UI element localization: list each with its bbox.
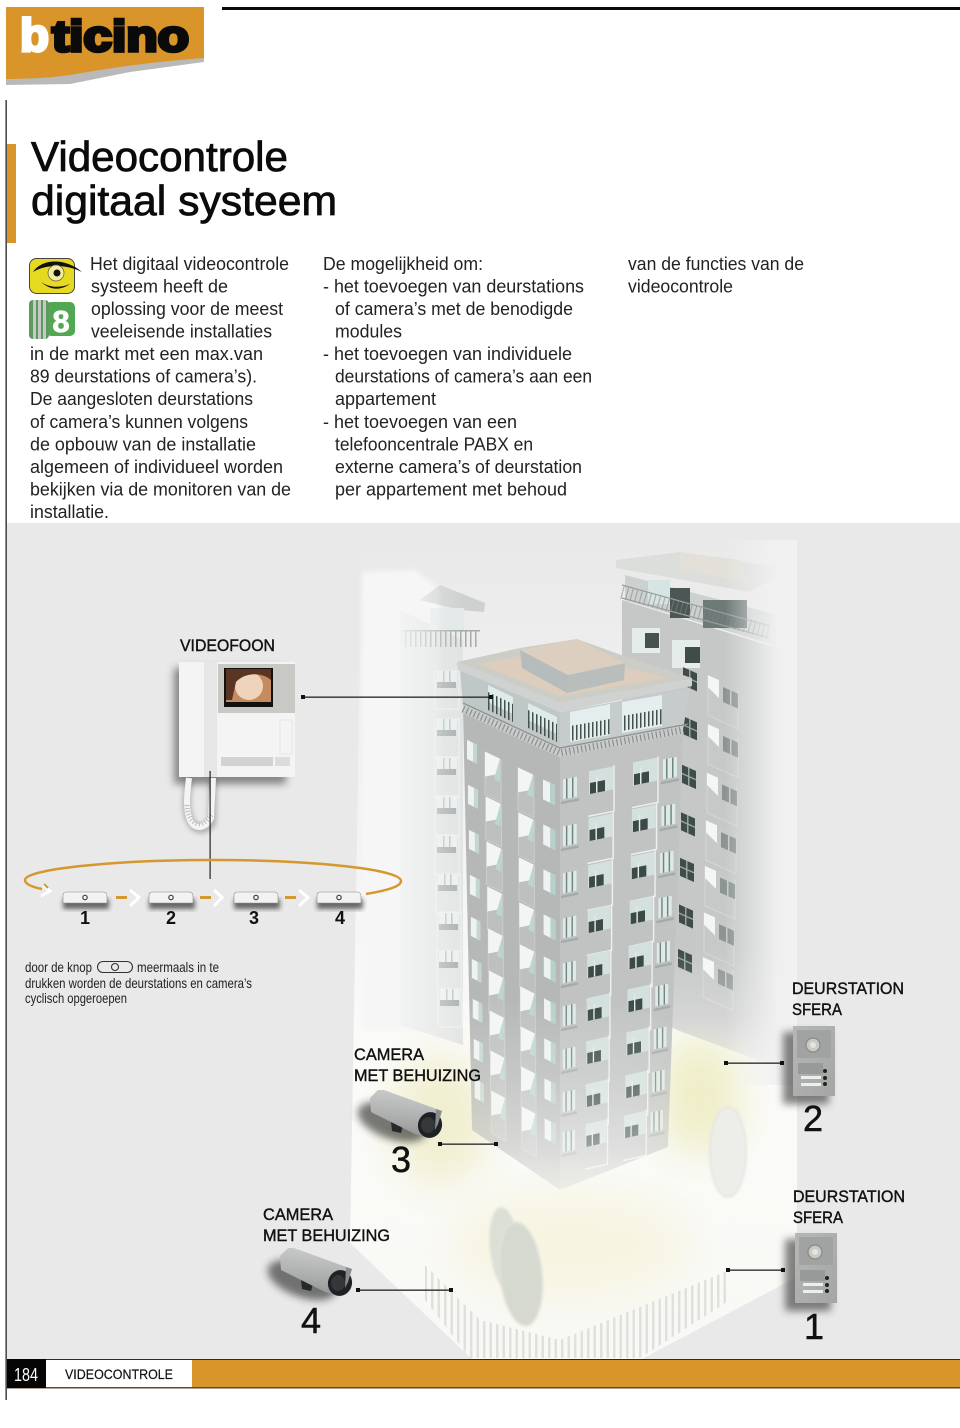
title: digitaal systeem [31,177,337,224]
arrow 1 to 2 [116,890,139,906]
arrow 3 to 4 [285,890,308,906]
label: deurstation 1: DEURSTATION [793,1187,905,1206]
diagram panel background [7,523,960,1360]
footer band [7,1359,960,1388]
label: deurstation 2: SFERA [792,1000,843,1019]
caption: door de knop [25,959,92,975]
text block: column 2: of camera’s met de benodigde [335,299,573,319]
title accent bar [7,144,16,243]
number 1: 1 [804,1306,824,1347]
footer: section title: VIDEOCONTROLE [65,1366,173,1382]
text block: column 2: De mogelijkheid om: [323,254,483,274]
number 4: 4 [301,1300,321,1341]
number 2: 2 [803,1098,823,1139]
text block: column 1: 89 deurstations of camera’s). [30,366,257,386]
connector: camera 3 [438,1142,498,1146]
label: camera 4: CAMERA [263,1205,334,1224]
text block: column 1: veeleisende installaties [91,322,272,342]
label: camera 3: CAMERA [354,1045,425,1064]
button 3 [234,892,280,909]
label: camera 4 [263,1205,390,1245]
button 4 [317,892,363,909]
text block: column 1: systeem heeft de [91,276,228,296]
camera 3 [352,1090,445,1150]
logo: bticino: ticino [52,12,189,61]
text block: column 2: - het toevoegen van deurstations [323,276,584,296]
connector: camera 4 [356,1288,453,1292]
top rule [222,7,960,10]
connector: door station 1 [726,1268,785,1272]
text block: column 1: De aangesloten deurstations [30,389,253,409]
text block: column 1: of camera’s kunnen volgens [30,412,248,432]
text block: column 2 [323,254,592,500]
text block: column 1: bekijken via de monitoren van de [30,480,291,500]
logo: bticino [6,7,204,85]
cycle loop arrow [25,860,401,896]
door station 2 [783,1026,835,1104]
button 2 [149,892,195,909]
text block: column 3: van de functies van de [628,254,804,274]
text block: column 1: Het digitaal videocontrole [90,254,289,274]
left page rule [6,100,7,1400]
title: Videocontrole [31,133,288,180]
button numbers: 3 [249,908,259,928]
label: camera 3 [354,1045,481,1085]
back tower right fade [725,540,797,1085]
text block: column 2: - het toevoegen van individuele [323,344,572,364]
label: deurstation 1: SFERA [793,1208,844,1227]
text block: column 1 [30,254,291,522]
caption [25,959,252,1006]
label: deurstation 1 [793,1187,905,1227]
caption: meermaals in te [137,959,219,975]
text block: column 1: algemeen of individueel worden [30,457,283,477]
text block: column 2: - het toevoegen van een [323,412,517,432]
trees [486,1107,746,1328]
building: back tower [616,552,770,1057]
caption: drukken worden de deurstations en camera’s [25,975,252,991]
connector: videophone to building [301,695,493,699]
building: left tower [400,585,485,1045]
text block: column 1: in de markt met een max.van [30,344,263,364]
label: camera 4: MET BEHUIZING [263,1226,390,1245]
left face [463,708,560,1190]
footer: page number: 184 [14,1365,38,1385]
button numbers: 2 [166,908,176,928]
caption: cyclisch opgeroepen [25,990,127,1006]
building: penthouse floor and roof [457,639,692,753]
title [31,133,337,224]
camera 4 [262,1248,355,1308]
text block: column 2: appartement [335,389,436,409]
button numbers: 1 [80,908,90,928]
text block: column 2: deurstations of camera’s aan een [335,366,592,386]
label: videofoon: VIDEOFOON [180,636,275,655]
text block: column 2: per appartement met behoud [335,480,567,500]
videophone [174,662,295,829]
building: main tower [463,708,683,1190]
logo: bticino: b [20,9,49,61]
icon: 8 door stations: 8 [52,304,70,339]
label: deurstation 2: DEURSTATION [792,979,904,998]
label: camera 3: MET BEHUIZING [354,1066,481,1085]
text block: column 1: installatie. [30,502,109,522]
right face [560,746,674,1190]
number 3: 3 [391,1139,411,1180]
label: deurstation 2 [792,979,904,1019]
text block: column 2: modules [335,322,402,342]
arrow 2 to 3 [200,890,222,906]
text block: column 2: telefooncentrale PABX en [335,434,533,454]
button numbers [80,908,345,928]
connector: door station 2 [724,1061,784,1065]
footer: page number [7,1359,46,1388]
connector: videophone to buttons [210,771,211,879]
text block: column 1: oplossing voor de meest [91,299,283,319]
button numbers: 4 [335,908,345,928]
text block: column 1: de opbouw van de installatie [30,434,256,454]
text block: column 3: videocontrole [628,276,733,296]
footer: section title [46,1360,192,1387]
text block: column 3 [628,254,804,296]
icon: 8 door stations [29,300,75,339]
door station 1 [785,1233,837,1311]
button 1 [63,892,109,909]
ground: light area under building [350,540,797,1360]
text block: column 2: externe camera’s of deurstation [335,457,582,477]
icon: eye [30,258,82,294]
